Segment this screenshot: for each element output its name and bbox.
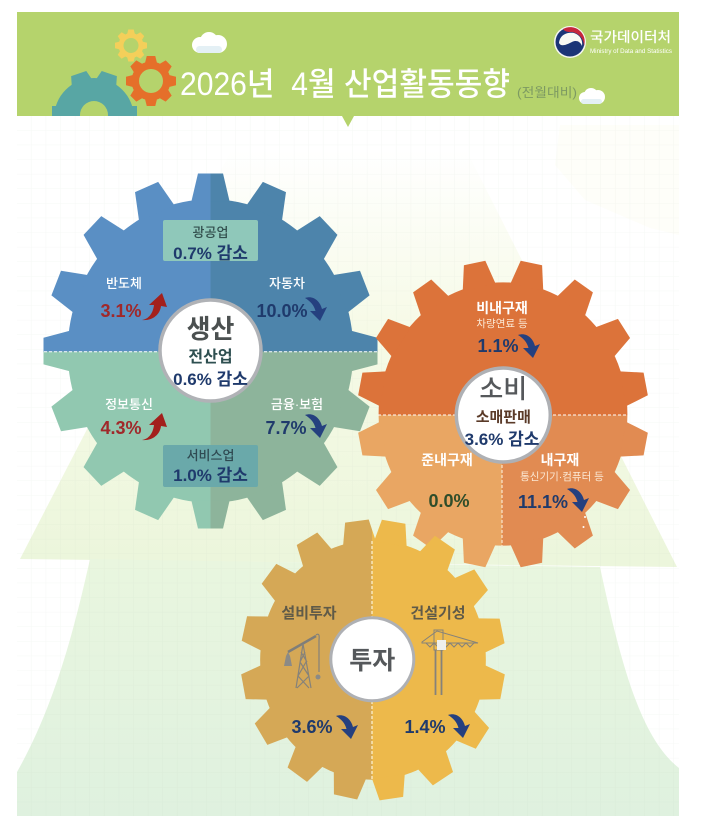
ICT: 정보통신 [105, 397, 153, 412]
semiconductors: 반도체 [106, 276, 142, 291]
durable goods: 내구재 [541, 452, 579, 468]
durable goods: 11.1% [518, 492, 568, 512]
consumption hub: 소비 [479, 374, 527, 404]
semi-durable goods [421, 452, 473, 511]
ministry name: 국가데이터처 [590, 29, 671, 45]
icon: oil pump [284, 634, 320, 688]
equipment investment: 설비투자 [281, 605, 337, 622]
automobiles: 자동차 [269, 276, 305, 291]
mining box: 광공업 [193, 225, 228, 240]
non-durable goods: 차량연료 등 [476, 318, 528, 330]
durable goods [518, 452, 604, 528]
ministry english name: Ministry of Data and Statistics [590, 49, 672, 55]
investment hub [331, 618, 414, 701]
consumption hub: 소매판매 [476, 409, 531, 426]
header banner [17, 12, 679, 127]
construction [404, 605, 470, 738]
ICT: 4.3% [100, 418, 142, 438]
finance and insurance: 금융·보험 [271, 397, 323, 412]
non-durable goods [476, 300, 540, 358]
non-durable goods: 1.1% [477, 336, 519, 356]
icon: tower crane [422, 630, 478, 695]
finance and insurance: 7.7% [265, 418, 307, 438]
services box: 서비스업 [187, 448, 234, 463]
non-durable goods: 비내구재 [476, 300, 528, 316]
equipment investment: 3.6% [291, 717, 333, 737]
semiconductors: 3.1% [100, 301, 142, 321]
subtitle: (전월대비) [517, 85, 577, 100]
icon: header gears [52, 30, 176, 116]
services box: 1.0% 감소 [173, 466, 248, 485]
services box [163, 445, 258, 487]
construction: 건설기성 [410, 605, 466, 622]
investment hub: 투자 [349, 647, 395, 675]
consumption hub: 3.6% 감소 [465, 430, 539, 449]
consumption hub [456, 368, 550, 462]
mining box [163, 220, 258, 263]
production hub: 생산 [187, 314, 234, 344]
title: 2026년 4월 산업활동동향 [180, 66, 510, 102]
semiconductors [100, 276, 167, 321]
construction: 1.4% [404, 717, 446, 737]
semi-durable goods: 0.0% [428, 491, 470, 511]
production hub: 0.6% 감소 [173, 370, 248, 389]
equipment investment [281, 605, 358, 739]
automobiles: 10.0% [256, 301, 308, 321]
panel: production gear [43, 174, 378, 528]
finance and insurance [265, 397, 327, 438]
automobiles [256, 276, 327, 321]
production hub: 전산업 [188, 348, 233, 366]
mining box: 0.7% 감소 [173, 244, 248, 263]
panel: investment gear [240, 519, 506, 801]
icon: cloud top [192, 32, 227, 53]
ICT [100, 397, 167, 440]
durable goods: 통신기기·컴퓨터 등 [520, 471, 604, 483]
panel: consumption gear [358, 260, 648, 568]
semi-durable goods: 준내구재 [421, 452, 473, 468]
icon: ministry emblem [554, 26, 586, 58]
production hub [160, 300, 261, 401]
icon: cloud bottom [579, 88, 605, 104]
